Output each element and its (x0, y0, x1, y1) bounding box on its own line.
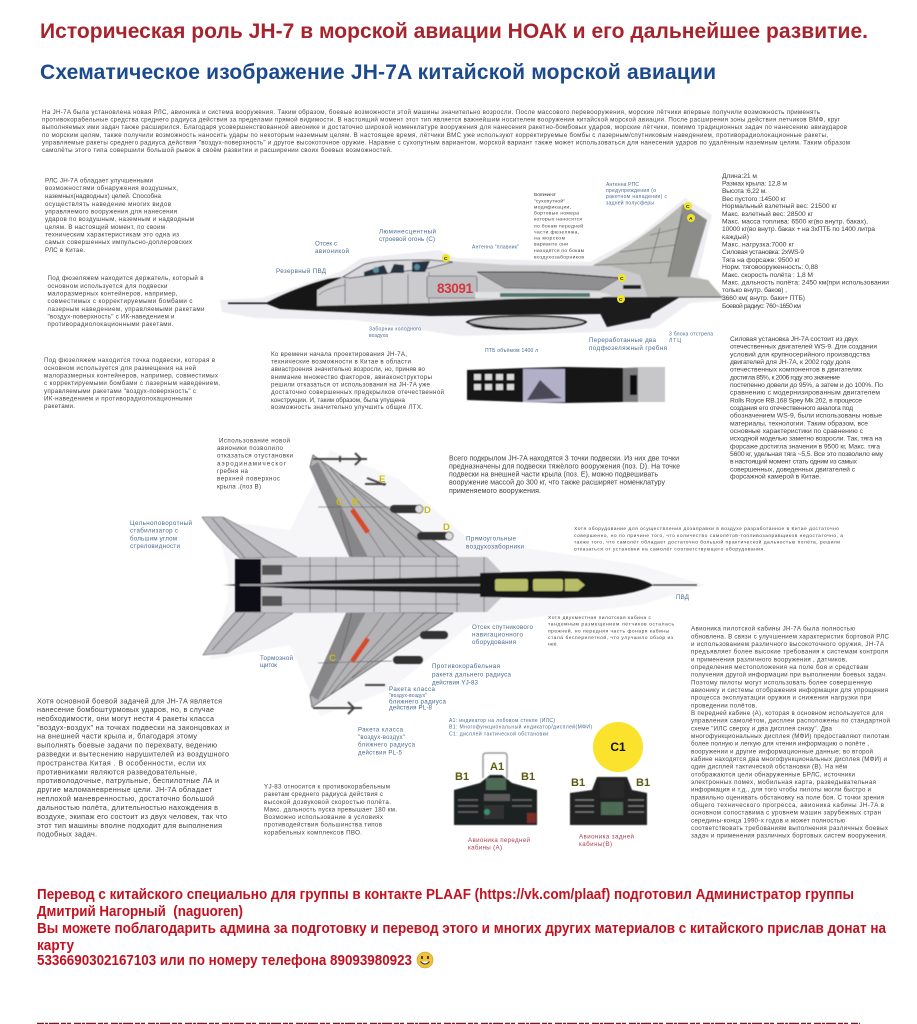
upper stabilizer (202, 517, 297, 558)
insignia stripes (350, 508, 370, 663)
note: side number placement: которых наносятся (534, 218, 582, 223)
label group: top view callouts: Отсек спутникового (472, 624, 534, 631)
text block: powerplant: основные характеристики по сравнению с (730, 428, 864, 435)
illustration: front cockpit (454, 753, 537, 825)
label group: top view callouts: воздухозаборники (466, 543, 525, 550)
text block: cockpit avionics: более полную и легкую для чтения информацию о полёте , (691, 741, 869, 748)
text block: cockpit avionics: Поэтому пилоты могут использовать более совершенную (691, 679, 872, 686)
text block: design history: конструкции. И, таким образом, была упущена (271, 397, 406, 404)
text block: in-flight refuelling: отказаться от установки на самолёт соответствующего оборудования. (574, 547, 765, 553)
text block: radar: РЛС JH-7A обладает улучшенными (45, 178, 154, 184)
text block: YJ-83 missile: корабельных комплексов ПВО. (264, 829, 362, 836)
text block: in-flight refuelling: Хотя оборудование для осуществления дозаправки в воздухе разработанное в Китае достаточно (574, 526, 839, 532)
label group: top view callouts: Тормозной (260, 655, 294, 662)
text block: specifications: Размах крыла: 12,8 м (722, 180, 787, 188)
label group: top view callouts: действия PL-5 (358, 749, 403, 756)
text block: powerplant: обозначением WS-9, были использованы новые (730, 412, 882, 420)
caption: rear cockpit (579, 833, 635, 848)
background halo (220, 198, 730, 336)
legend: cockpit displays: B1: Многофункциональный индикатор/дисплей(МФИ) (449, 724, 592, 730)
text block: under-fuselage pylon: малоразмерных контейнеров, например, (48, 290, 178, 298)
tail intake rect (623, 285, 641, 289)
note: side number placement: части фюзеляжа, (534, 230, 579, 236)
text block: radar: возможностями обнаружения воздушных, (45, 185, 178, 192)
text block: radar: наземных(надводных) целей. Способна (45, 193, 162, 200)
text block: cockpit avionics: информация и т.д., для того чтобы пилоты могли быстро и (691, 787, 872, 794)
text block: combat role: этот тип машины вполне подходит для выполнения (37, 821, 222, 830)
text block: under-fuselage pylon (48, 275, 205, 328)
illustration: rear cockpit: B1 (636, 777, 650, 789)
note: side number placement (534, 192, 585, 260)
illustration: external fuel tank cutaway (467, 367, 665, 403)
label group: side view callouts: ракетном нападении) с (606, 194, 668, 200)
text block: specifications: Длина:21 м (722, 173, 757, 180)
label group: top view callouts: "воздух-воздух" (358, 735, 405, 741)
dark belly (317, 297, 680, 316)
text block: suspension point: с корректируемыми бомбами с лазерным наведением, (44, 380, 220, 387)
illustration: side view of JH-7A: C (686, 204, 690, 210)
position letters: D (443, 522, 450, 533)
missiles and stores (313, 453, 385, 485)
text block: design history: технические возможности в Китае в области (271, 358, 412, 366)
text block: specifications (722, 173, 889, 310)
text block: powerplant: форсаже достигла значения в 9500 кг, Макс. тяга (730, 443, 880, 450)
text block: combat role: Хотя основной боевой задачей для JH-7A является (37, 696, 222, 705)
label group: top view callouts: Ракета класса (389, 686, 436, 693)
label group: top view callouts: стабилизатор с (130, 528, 178, 535)
drop tank (467, 316, 586, 329)
text block: combat role (37, 696, 229, 839)
text block: specifications: Нормальный взлетный вес: 21500 кг (722, 202, 838, 210)
text block: combat role: пространства Китая . В особенности, если их (37, 758, 206, 767)
text block: hardpoints: подвески на внешней части крыла (поз. E), можно подвешивать (449, 471, 658, 479)
text block: introduction: по морским целям, также получили возможность наносить удары по некоторым наземным целям. В настоящее время, лётчики ВМС уже используют корректируемые бомбы с лазерным/спутниковым наведением, противорадиолокационные ракеты, (42, 132, 828, 139)
note: side number placement: находятся по бокам (534, 248, 585, 254)
credits: карту (37, 937, 75, 954)
text block: suspension point: Под фюзеляжем находится точка подвески, которая в (44, 357, 216, 364)
text block: YJ-83 missile: ракетам среднего радиуса действия с (264, 791, 383, 798)
text block: cockpit canopy: тандемным размещением лётчиков осталась (548, 622, 674, 628)
text block: suspension point: ракетами. (44, 403, 75, 410)
label group: top view callouts: "воздух-воздух" (389, 693, 427, 699)
text block: powerplant: Rolls Royce RB.168 Spey Mk 202, в процессе (730, 397, 862, 404)
text block: YJ-83 missile: высокой дозвуковой скоростью полёта. (264, 799, 391, 806)
text block: powerplant: условий для крупносерийного производства (730, 350, 870, 358)
note: side number placement: на морском (534, 237, 566, 242)
label group: side view callouts: Отсек с (315, 240, 337, 248)
text block: design history: авиастроения значительно возросли, но, приняв во (271, 366, 426, 373)
text block: powerplant (730, 336, 884, 480)
ventral fin (600, 309, 654, 327)
text block: introduction: управляемые ракеты среднего радиуса действия "воздух-поверхность" и другое высокоточное оружие. Наравне с сухопутным вариантом, морской вариант также может использоваться для нанесения ударов по удалённым наземным целям. Таким образом (42, 140, 850, 146)
text block: specifications: Макс. взлетный вес: 28500 кг (722, 210, 814, 218)
black nose (480, 571, 653, 598)
text block: powerplant: постепенно довели до 95%, а затем и до 100%. По (730, 382, 883, 389)
text block: powerplant: отечественных двигателей WS-9. Для создания (730, 343, 877, 351)
lower wing (310, 612, 453, 707)
text block: cockpit canopy: неё. (548, 642, 558, 648)
label group: side view callouts: ЛТЦ (669, 338, 681, 344)
fin and body (593, 204, 722, 300)
illustration: side view of JH-7A: C (620, 276, 624, 282)
number panel (427, 276, 477, 298)
canopy (343, 260, 453, 278)
label group: side view callouts: Резервный ПВД (276, 268, 327, 275)
text block: cockpit avionics: многофункциональных дисплея (МФИ) предоставляют пилотам (691, 733, 889, 740)
text block: YJ-83 missile (264, 783, 397, 836)
text block: cockpit avionics: В передней кабине (A), которая в основном используется для (691, 710, 883, 717)
text block: specifications: 3660 км( внутр. баки+ ПТБ) (722, 294, 805, 302)
text block: hardpoints: Всего подкрылом JH-7A находятся 3 точки подвески. Из них две точки (449, 455, 679, 462)
text block: YJ-83 missile: YJ-83 относится к противокорабельным (264, 783, 390, 790)
illustration: rear cockpit: B1 (571, 777, 585, 789)
text block: winglet fence: крыла .(поз В) (217, 483, 261, 490)
text block: cockpit canopy: Хотя двухместная пилотская кабина с (548, 615, 652, 621)
illustration: side view of JH-7A (220, 198, 730, 336)
text block: suspension point: основном используется для размещения на ней (44, 365, 197, 372)
text block: hardpoints: предназначены для подвески тяжёлого вооружения (поз. D). На точке (449, 464, 680, 471)
text block: winglet fence: верхней поверхнос (217, 476, 280, 483)
text block: cockpit avionics: обновлена. В связи с улучшением характеристик бортовой РЛС (691, 633, 890, 640)
label group: top view callouts: действия PL-8 (389, 705, 433, 712)
text block: suspension point: малоразмерных контейнеров, например, совместимых (44, 372, 219, 380)
text block: winglet fence (217, 437, 294, 490)
caption: rear cockpit: Авионика задней (579, 833, 635, 840)
label group: top view callouts: ракета дальнего радиуса (432, 671, 512, 678)
text block: suspension point: ИК-наведением и противорадиолокационными (44, 396, 193, 402)
text block: design history (271, 351, 445, 411)
text block: winglet fence: Использование новой (219, 437, 291, 444)
text block: winglet fence: авионики позволило (217, 445, 284, 452)
text block: specifications: только внутр. баков) , (722, 286, 787, 294)
text block: powerplant: исходной моделью заметно возросли. Так, тяга на (730, 435, 882, 443)
text block: specifications: Боевой радиус: 760~1650 км (722, 302, 801, 310)
text block: radar: осуществлять наведение многих видов (45, 201, 172, 208)
text block: winglet fence: гребня на (217, 468, 249, 475)
label group: top view callouts: действия YJ-83 (432, 679, 479, 686)
text block: design history: Ко времени начала проектирования JH-7A, (271, 351, 407, 358)
text block: cockpit avionics: управления самолётом, дисплеи расположены по стандартной (691, 718, 891, 725)
lower stabilizer (203, 612, 293, 655)
illustration: rear cockpit (570, 777, 650, 825)
text block: specifications: Макс. масса топлива: 6500 кг(во внутр. баках), (722, 218, 868, 226)
text block: combat role: дальностью полёта, длительностью нахождения в (37, 803, 218, 812)
legend: cockpit displays (449, 718, 592, 738)
label group: side view callouts: ПТБ объёмом 1400 л (485, 348, 538, 354)
text block: powerplant: в настоящий момент стать одним из самых (730, 458, 858, 466)
note: side number placement: "сухопутной" (534, 197, 565, 204)
text block: cockpit avionics: электронных помех, мобильная карта, разведывательная (691, 779, 876, 786)
label group: top view callouts: ПВД (676, 594, 690, 601)
text block: hardpoints (449, 455, 680, 495)
text block: cockpit avionics: схеме "ИЛС сверху и два дисплея снизу". Два (691, 725, 833, 732)
text block: cockpit avionics: один дисплей тактической обстановки (B). На нём (691, 764, 847, 771)
illustration: side view of JH-7A: A (689, 216, 693, 222)
text block: cockpit avionics: кабине находятся два многофункциональных дисплея (МФИ) и (691, 756, 888, 763)
label group: side view callouts (276, 182, 713, 354)
text block: specifications: Тяга на форсаже: 9500 кг (722, 257, 801, 264)
fuselage (235, 557, 502, 613)
text block: YJ-83 missile: Возможно использование в условиях (264, 814, 384, 821)
label group: top view callouts: навигационного (472, 631, 524, 638)
text block: combat role: другие маломаневренные цели. JH-7A обладает (37, 785, 213, 794)
text block: radar: РЛС в Китае. (45, 247, 85, 254)
text block: powerplant: Силовая установка JH-7A состоит из двух (730, 336, 859, 343)
text block: specifications: Макс. нагрузка:7000 кг (722, 242, 795, 248)
text block: YJ-83 missile: противодействия большинства типов (264, 822, 383, 829)
text block: winglet fence: аэродинамическог (217, 460, 287, 467)
label group: side view callouts: задней полусферы (606, 200, 654, 206)
text block: cockpit avionics: авионику и системы отображения информации для упрощения (691, 687, 888, 694)
position letters: B (352, 497, 359, 508)
text block: combat role: необходимости, они могут нести 4 ракеты класса (37, 714, 214, 723)
text block: powerplant: достигла 85%, к 2006 году это значение (730, 374, 840, 381)
text block: combat role: выполнять боевые задачи по перехвату, ведению (37, 741, 218, 750)
text block: cockpit avionics: основном сопоставима с уровнем машин зарубежных стран (691, 810, 881, 817)
text block: cockpit avionics: предъявляет более высокие требования к системам контроля (691, 649, 888, 656)
text block: hardpoints: применяемого вооружения. (449, 488, 541, 495)
text block: cockpit canopy (548, 615, 674, 648)
caption: front cockpit: кабины (A) (468, 845, 502, 852)
text block: cockpit canopy: прежней, но передняя часть фонаря кабины (548, 627, 669, 634)
note: side number placement: бортовые номера (534, 211, 579, 217)
text block: cockpit avionics: задач и применения различных бортовых систем вооружения. (691, 833, 887, 840)
label group: side view callouts: строевой огонь (C) (379, 236, 435, 243)
text block: specifications: Высота :6,22 м. (722, 188, 767, 195)
text block: under-fuselage pylon: совместимых с корректируемыми бомбами с (48, 298, 192, 305)
text block: radar: техническим характеристикам это одна из (45, 232, 179, 238)
position letters: C (336, 497, 343, 508)
label group: top view callouts (130, 520, 690, 756)
text block: combat role: подобных задач. (37, 830, 97, 839)
text block: design history: возможность значительно улучшить общие ЛТХ. (271, 404, 423, 411)
position letters (329, 474, 450, 664)
note: side number placement: варианте они (534, 243, 568, 248)
text block: specifications: Норм. тяговооруженность: 0,88 (722, 264, 818, 271)
label group: side view callouts: 3 блока отстрела (669, 332, 713, 338)
illustration: top view of JH-7A (202, 450, 705, 716)
text block: design history: решили отказаться от использования на JH-7A уже (271, 382, 431, 388)
caption: front cockpit (468, 837, 531, 852)
text block: under-fuselage pylon: основном используется для подвески (48, 283, 168, 290)
text block: design history: достаточно совершенных предкрылков отечественной (271, 389, 445, 396)
text block: combat role: разведки и вытеснению нарушителей из воздушного (37, 749, 229, 758)
label group: top view callouts: ближнего радиуса (358, 742, 416, 748)
label group: side view callouts: авионикой (315, 248, 350, 255)
label group: side view callouts: Антенна РПС (606, 182, 639, 188)
text block: radar: управляемого вооружения для нанесения (45, 208, 177, 216)
note: side number placement: по бокам передней (534, 222, 583, 229)
illustration: front cockpit: B1 (455, 771, 469, 783)
note: side number placement: модификации, (534, 204, 571, 210)
text block: powerplant: сравнению с модернизированным двигателем (730, 390, 880, 397)
text block: introduction (42, 109, 850, 154)
label group: side view callouts: Переработанные два (589, 337, 657, 344)
legend: cockpit displays: A1: индикатор на лобовом стекле (ИЛС) (449, 718, 555, 724)
label group: side view callouts: Люминесцентный (379, 228, 437, 236)
text block: suspension point (44, 357, 220, 410)
credits (37, 886, 887, 969)
text block: combat role: воздухе, экипаж его состоит из двух человек, так что (37, 812, 227, 821)
text block: specifications: каждый) (722, 233, 749, 241)
nose radome (228, 277, 343, 311)
text block: introduction: выполняемых ими задач также расширился. Благодаря усовершенствованной авионике и достаточно широкой номенклатуре вооружения для нанесения ракетно-бомбовых ударов, морские лётчики, помимо традиционных задач по нанесению авиаударов (42, 124, 848, 131)
text block: specifications: Макс. скорость полёта : 1,8 М (722, 272, 813, 279)
callout: C1 marker (593, 722, 643, 772)
text block: radar: ударов по воздушным, наземным и надводным (45, 216, 194, 223)
text block: in-flight refuelling (574, 526, 843, 553)
text block: introduction: самолёты этого типа совершили большой рывок в своём развитии и расширении своих боевых возможностей. (42, 147, 392, 154)
text block: cockpit avionics (691, 626, 891, 840)
text block: combat role: на внешней части крыла и, благодаря этому (37, 732, 197, 741)
text block: specifications: 10000 кг(во внутр. баках + на 3хПТБ по 1400 литра (722, 225, 875, 233)
position letters: E (379, 474, 385, 485)
label group: top view callouts: стреловидности (130, 543, 181, 550)
text block: winglet fence: отказаться отустановки (217, 453, 294, 460)
label group: top view callouts: Ракета класса (358, 727, 404, 733)
wing (477, 272, 620, 290)
position letters: C (329, 653, 336, 664)
text block: design history: внимание множество факторов, авиаконструкторы (271, 374, 433, 381)
label group: side view callouts: Заборник холодного (369, 326, 421, 332)
label group: top view callouts: ближнего радиуса (389, 698, 447, 705)
text block: under-fuselage pylon: Под фюзеляжем находится держатель, который в (48, 275, 204, 282)
text block: introduction: противокорабельные средства среднего радиуса действия за пределами прямой видимости. В настоящий момент этот тип является важнейшим носителем вооружения китайской морской авиации. После расширения зоны действия летчиков ВМФ, круг (42, 116, 841, 124)
illustration: side view of JH-7A: C (619, 297, 623, 303)
text block: cockpit avionics: отображаются цели обнаруженные БРЛС, источники (691, 771, 856, 778)
text block: powerplant: создания его отечественного аналога под (730, 405, 853, 412)
illustration: front cockpit: B1 (521, 771, 535, 783)
illustration: front cockpit: A1 (490, 761, 504, 773)
note: side number placement: В отличие от (534, 192, 557, 198)
illustration: side view of JH-7A: C (444, 256, 448, 262)
label group: top view callouts: Прямоугольные (466, 535, 517, 542)
text block: combat role: противолодочные, патрульные, беспилотные ЛА и (37, 776, 219, 785)
label group: top view callouts: щиток (260, 662, 277, 669)
text block: YJ-83 missile: Макс. дальность пуска превышает 180 км. (264, 806, 397, 813)
text block: combat role: неплохой маневренностью, достаточно большой (37, 794, 214, 803)
text block: radar: целям. В настоящий момент, по своим (45, 224, 165, 231)
text block: combat role: нанесение бомбоштурмовых ударов, но, в случае (37, 705, 214, 714)
credits: Дмитрий Нагорный (naguoren) (37, 903, 243, 920)
credits: 5336690302167103 или по номеру телефона 89093980923 (37, 952, 412, 969)
text block: specifications: Силовая установка: 2хWS-9 (722, 249, 804, 256)
text block: cockpit avionics: Авионика пилотской кабины JH-7A была полностью (691, 626, 855, 633)
text block: powerplant: материалы, технологии. Таким образом, все (730, 419, 868, 427)
label group: side view callouts: подфюзеляжный гребня (589, 345, 667, 352)
label group: top view callouts: большим углом (130, 535, 177, 542)
label group: side view callouts: предупреждения (о (606, 188, 656, 194)
text block: radar (45, 178, 194, 254)
text block: cockpit avionics: соответствовать требованиям выполнения различных боевых (691, 825, 889, 832)
text block: cockpit avionics: проведении полётов. (691, 702, 757, 709)
label group: side view callouts: воздуха (369, 333, 388, 339)
label group: top view callouts: Противокорабельная (432, 663, 500, 670)
text block: cockpit avionics: середины-конца 1990-х годов и может полностью (691, 817, 845, 824)
text block: powerplant: двигателей для JH-7A, к 2002 году доля (730, 358, 850, 366)
title: Историческая роль JH-7 в морской авиации НОАК и его дальнейшее развитие. (40, 20, 868, 43)
text block: cockpit avionics: получения другой информации при выполнении боевых задач. (691, 672, 887, 679)
text block: cockpit avionics: процесса эксплуатации оружия и снижения нагрузки при (691, 695, 872, 702)
caption: front cockpit: Авионика передней (468, 837, 531, 844)
text block: cockpit avionics: вооружении и другие информационные данные; во второй (691, 748, 874, 755)
text block: in-flight refuelling: также того, что самолёт обладает достаточно большой практической дальностью полёта, решили (574, 539, 840, 546)
text block: introduction: На JH-7A была установлена новая РЛС, авионика и система вооружения. Таким образом, боевые возможности этой машины значительно возросли. После массового перевооружения, морские лётчики впервые получили возможность применять (42, 109, 820, 116)
text block: cockpit canopy: стала бесперелетной, что улучшило обзор из (548, 634, 674, 641)
label group: side view callouts: Антенна "плавник" (472, 244, 519, 250)
text block: cockpit avionics: правильно оценивать обстановку на поле боя. С точки зрения (691, 794, 884, 801)
note: side number placement: воздухозаборников (534, 254, 584, 260)
subtitle: Схематическое изображение JH-7A китайской морской авиации (40, 61, 716, 84)
text block: under-fuselage pylon: лазерным наведением, управляемыми ракетами (48, 306, 205, 313)
callout: C1 marker: C1 (610, 740, 626, 754)
label group: top view callouts: Цельноповоротный (130, 520, 193, 527)
text block: specifications: Вес пустого :14500 кг (722, 196, 787, 203)
text block: powerplant: 5600 кг, удельная тяга ~5,5. Все это позволило ему (730, 451, 884, 458)
icon: smiley emoji (417, 952, 433, 968)
text block: powerplant: отечественных компонентов в двигателях (730, 367, 863, 374)
text block: combat role: "воздух-воздух" на точках подвески на законцовках и (37, 723, 229, 732)
text block: cockpit avionics: и использованием различного высокоточного оружия, JH-7A (691, 641, 885, 648)
caption: rear cockpit: кабины(B) (579, 841, 612, 848)
upper wing (310, 455, 457, 557)
missile under wing (475, 292, 612, 298)
text block: suspension point: управляемыми ракетами "воздух-поверхность" с (44, 388, 196, 395)
text block: cockpit avionics: и применения различного вооружения , датчиков, (691, 656, 847, 663)
text block: powerplant: совершенных, доведенных двигателей с (730, 465, 856, 473)
text block: powerplant: форсажной камерой в Китае. (730, 472, 821, 480)
text block: combat role: противниками являются разведовательные, (37, 767, 197, 776)
text block: under-fuselage pylon: "воздух-поверхность" с ИК-наведением и (48, 314, 175, 320)
text block: in-flight refuelling: совершенно, но по причине того, что количество самолётов-топливозаправщиков недостаточно, а (574, 533, 843, 539)
text block: under-fuselage pylon: противорадиолокационными ракетами. (48, 321, 174, 328)
text block: cockpit avionics: определения местоположения на поле боя и средствам (691, 664, 868, 671)
text block: hardpoints: вооружение массой до 300 кг, что также расширяет номенклатуру (449, 479, 666, 487)
position letters: D (424, 505, 431, 516)
text block: radar: самых совершенных импульсно-доплеровских (45, 239, 193, 246)
side number: 83091 (437, 281, 473, 296)
legend: cockpit displays: C1: дисплей тактической обстановки (449, 730, 548, 738)
label group: top view callouts: оборудования (472, 639, 516, 646)
text block: specifications: Макс. дальность полёта: 2450 км(при использовании (722, 280, 889, 286)
text block: cockpit avionics: общего технического прогресса, авионика кабины JH-7A в (691, 802, 885, 809)
